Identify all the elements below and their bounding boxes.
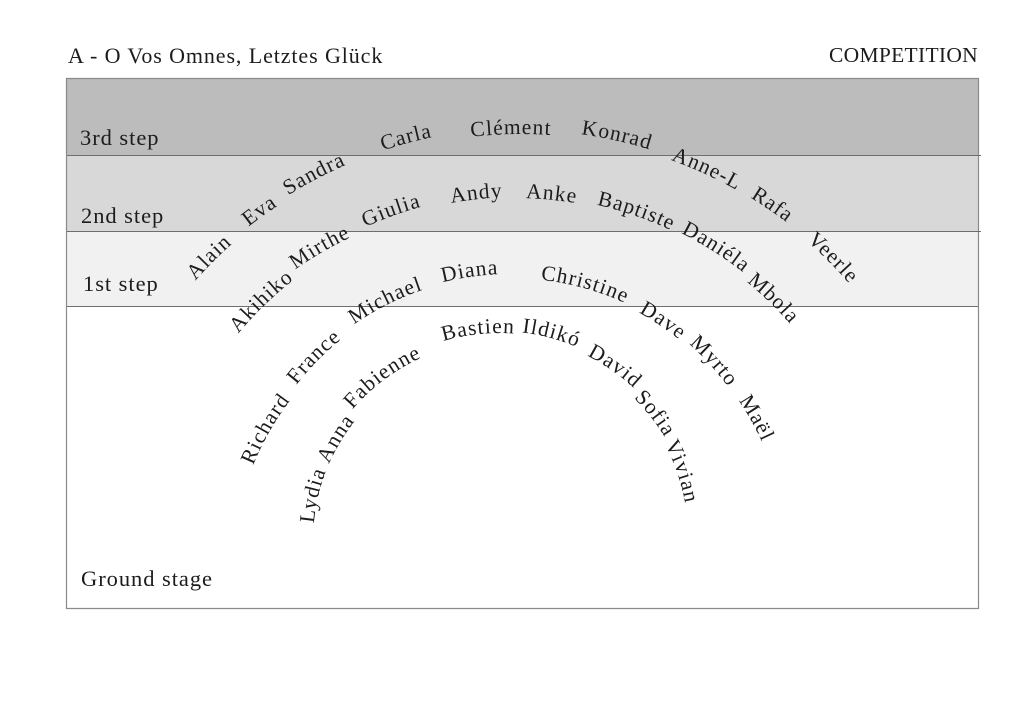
names arc 2: Daniéla — [682, 220, 747, 272]
names arc 3 — [240, 264, 774, 465]
names arc 3: Richard — [240, 393, 290, 465]
names arc 2: Giulia — [362, 197, 420, 225]
names arc 3: France — [286, 334, 340, 384]
band: 3rd step — [67, 78, 978, 155]
names arc 1 — [189, 120, 855, 282]
band: ground stage — [67, 306, 978, 608]
names arc 1: Clément — [471, 120, 550, 136]
label: 1st step: 1st step — [83, 271, 159, 296]
names arc 4: Ildikó — [522, 318, 580, 346]
names arc 4: Anna — [319, 418, 354, 464]
names arc 1: Konrad — [582, 120, 652, 150]
label: 2nd step: 2nd step — [81, 203, 164, 228]
names arc 1: Sandra — [283, 157, 346, 194]
names arc 1: Alain — [189, 238, 232, 280]
label: 3rd step: 3rd step — [80, 125, 159, 150]
names arc 2: Anke — [526, 184, 576, 203]
band: 1st step — [67, 231, 978, 306]
names arc 3: Myrto — [690, 334, 734, 384]
names arc 4: Bastien — [440, 319, 514, 341]
names arc 2: Mirthe — [288, 230, 349, 270]
names arc 3: Maël — [739, 393, 774, 442]
names arc 3: Christine — [542, 266, 627, 302]
names arc 2: Baptiste — [597, 191, 673, 229]
section label: competition: COMPETITION — [829, 43, 978, 67]
names arc 1: Veerle — [812, 230, 855, 282]
label: ground stage: Ground stage — [81, 566, 213, 591]
names arc 1: Anne-L — [671, 149, 738, 190]
names arc 2: Mbola — [747, 272, 796, 324]
names arc 3: Michael — [346, 276, 422, 324]
names arc 2: Andy — [451, 183, 502, 203]
names arc 1: Rafa — [751, 186, 790, 222]
names arc 4: Fabienne — [342, 350, 420, 409]
names arc 2: Akihiko — [232, 274, 292, 334]
title: A - O Vos Omnes, Letztes Glück — [68, 43, 383, 68]
names arc 4: Sofia — [635, 390, 672, 437]
band: 2nd step — [67, 155, 978, 231]
names arc 3: Diana — [440, 264, 498, 282]
names arc 3: Dave — [639, 300, 684, 338]
podium chart — [66, 78, 981, 610]
names arc 4: David — [588, 344, 642, 388]
names arc 4: Lydia — [300, 470, 326, 523]
names arc 1: Carla — [381, 126, 432, 149]
names arc 2 — [232, 183, 796, 334]
names arc 4 — [300, 318, 694, 523]
names arc 1: Eva — [240, 200, 277, 226]
names arc 4: Vivian — [668, 438, 694, 503]
